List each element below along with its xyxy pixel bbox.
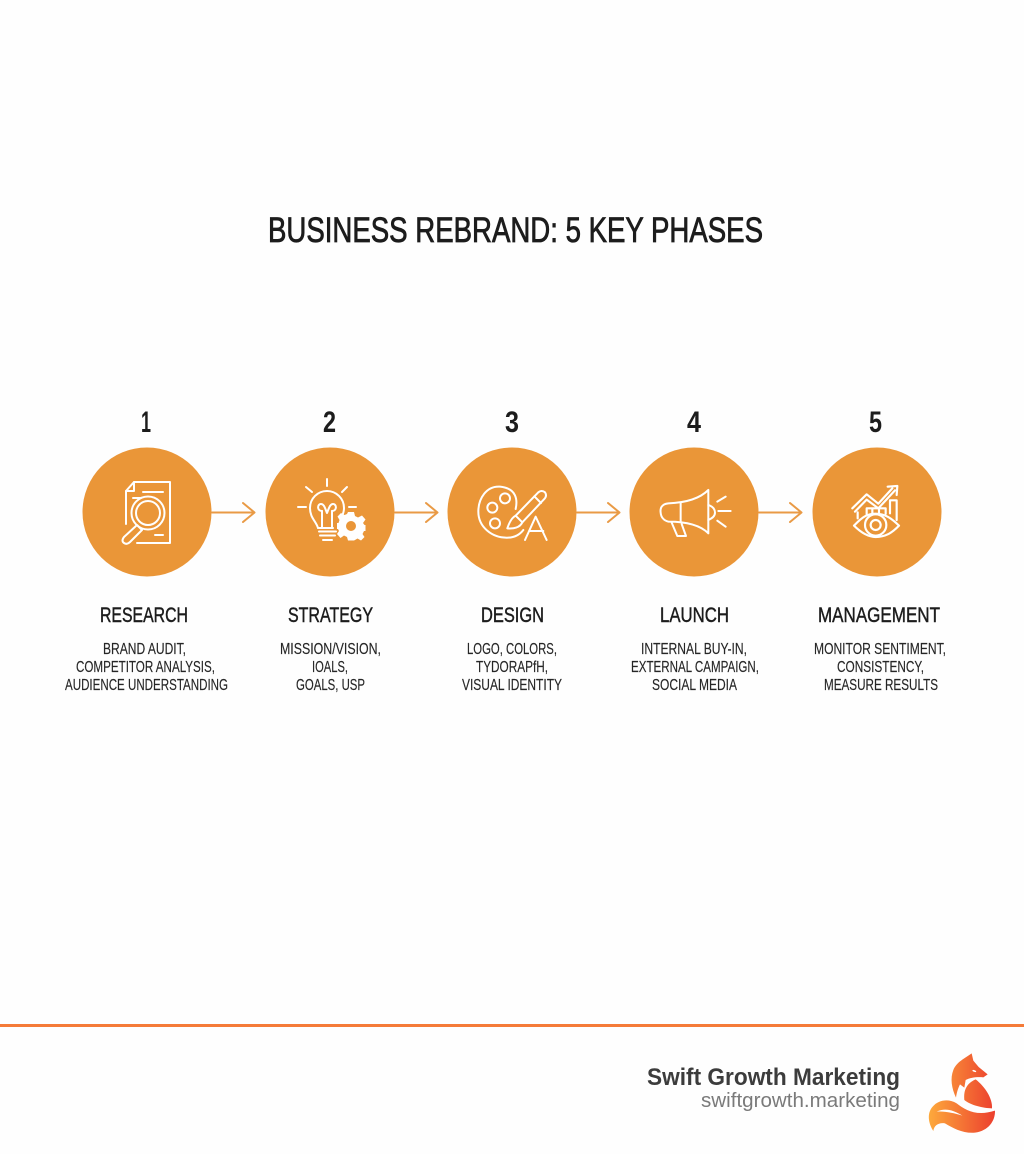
description: strategy: MISSION/VISION,: [280, 641, 381, 658]
heading: strategy: STRATEGY: [288, 604, 373, 627]
icon: fox logo: [929, 1053, 995, 1133]
description: management: [814, 641, 946, 694]
phase 2: strategy: [266, 406, 394, 694]
title: BUSINESS REBRAND: 5 KEY PHASES: [268, 211, 763, 250]
circle 5: [812, 448, 942, 576]
icon: megaphone: [661, 490, 731, 536]
description: design: VISUAL IDENTITY: [462, 677, 562, 694]
description: management: MEASURE RESULTS: [824, 677, 938, 694]
description: strategy: IOALS,: [312, 659, 348, 676]
number 3: 3: [505, 406, 519, 439]
heading: launch: LAUNCH: [660, 604, 729, 627]
description: launch: [631, 641, 759, 694]
heading: design: DESIGN: [481, 604, 544, 627]
description: launch: INTERNAL BUY-IN,: [641, 641, 747, 658]
description: research: [65, 641, 228, 694]
circle 1: [82, 448, 212, 576]
arrow 2 to 3: [395, 503, 438, 522]
description: research: COMPETITOR ANALYSIS,: [76, 659, 215, 676]
arrow 4 to 5: [759, 503, 802, 522]
description: strategy: [280, 641, 381, 694]
icon: palette, brush and letter A: [478, 487, 547, 540]
phase 1: research: [65, 406, 228, 694]
brand url: swiftgrowth.marketing: [701, 1090, 900, 1112]
description: research: AUDIENCE UNDERSTANDING: [65, 677, 228, 694]
heading: management: MANAGEMENT: [818, 604, 940, 627]
circle 2: [266, 448, 394, 576]
arrow 1 to 2: [212, 503, 254, 522]
icon: eye with growth chart: [852, 486, 899, 537]
circle 4: [630, 448, 758, 576]
circle 3: [448, 448, 576, 576]
number 2: 2: [323, 406, 336, 439]
description: management: CONSISTENCY,: [837, 659, 924, 676]
description: management: MONITOR SENTIMENT,: [814, 641, 946, 658]
description: strategy: GOALS, USP: [296, 677, 365, 694]
description: launch: SOCIAL MEDIA: [652, 677, 738, 694]
description: design: LOGO, COLORS,: [467, 641, 557, 658]
icon: document with magnifier: [122, 482, 170, 544]
heading: research: RESEARCH: [100, 604, 188, 627]
phase 4: launch: [630, 406, 759, 694]
brand name: Swift Growth Marketing: [647, 1064, 900, 1091]
description: design: TYDORAPfH,: [476, 659, 548, 676]
number 4: 4: [687, 406, 701, 439]
footer brand: [647, 1053, 995, 1133]
description: launch: EXTERNAL CAMPAIGN,: [631, 659, 759, 676]
description: design: [462, 641, 562, 694]
phase 3: design: [448, 406, 576, 694]
number 5: 5: [869, 406, 882, 439]
phase 5: management: [812, 406, 946, 694]
description: research: BRAND AUDIT,: [103, 641, 186, 658]
footer divider: [0, 1024, 1024, 1027]
number 1: 1: [141, 406, 151, 439]
arrow 3 to 4: [577, 503, 620, 522]
icon: light bulb and gear: [298, 479, 366, 540]
